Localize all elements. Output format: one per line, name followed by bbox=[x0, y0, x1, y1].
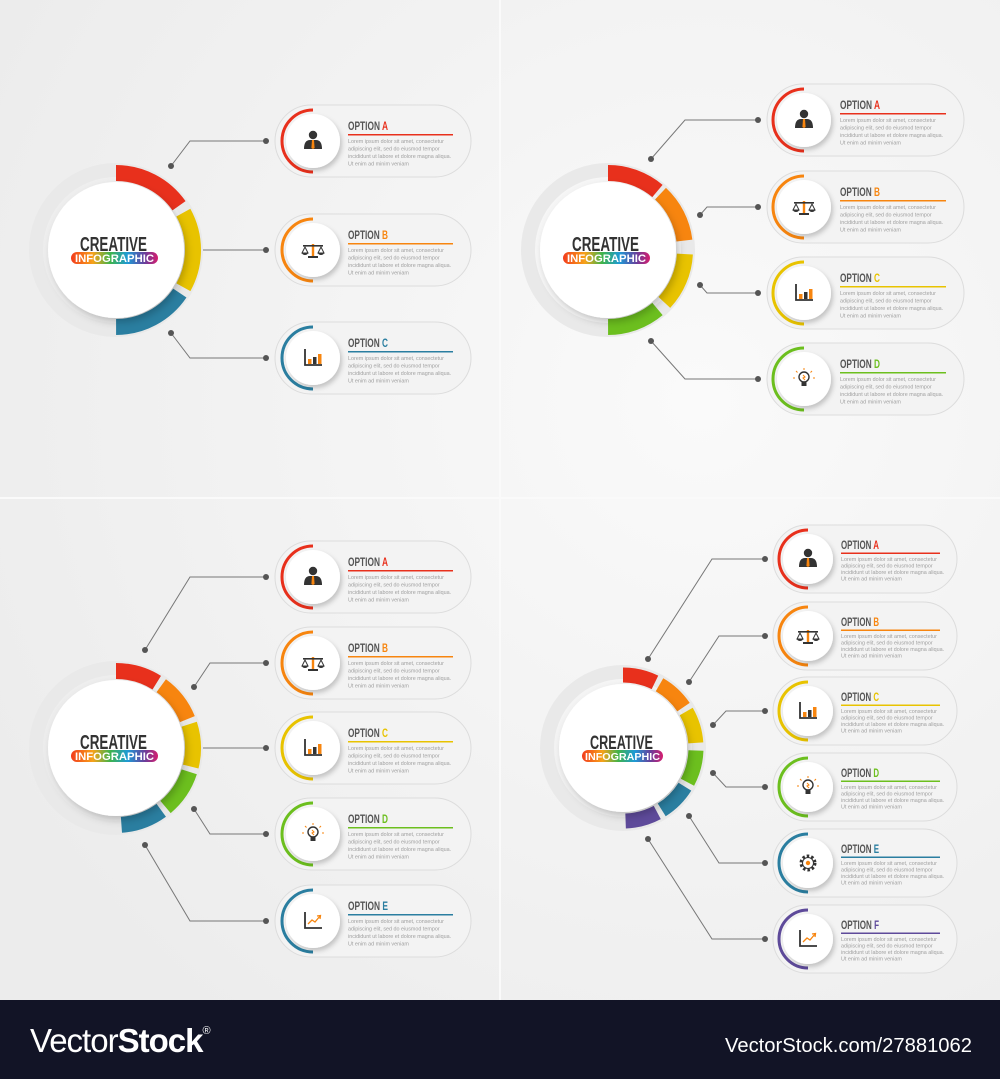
option C: OPTION C bbox=[348, 336, 388, 350]
main circle bbox=[522, 647, 724, 849]
option C: incididunt ut labore et dolore magna aliqua. bbox=[348, 761, 451, 767]
option A: incididunt ut labore et dolore magna aliqua. bbox=[840, 133, 943, 139]
option B bbox=[773, 602, 957, 670]
option D: OPTION D bbox=[840, 357, 880, 371]
option C bbox=[275, 712, 471, 784]
option C bbox=[767, 257, 964, 329]
option C: Ut enim ad minim veniam bbox=[348, 768, 409, 774]
option B bbox=[767, 171, 964, 243]
connectors bbox=[648, 559, 765, 939]
option E: OPTION E bbox=[841, 844, 879, 856]
option C: OPTION C bbox=[841, 692, 879, 704]
option A: incididunt ut labore et dolore magna aliqua. bbox=[348, 590, 451, 596]
option F: incididunt ut labore et dolore magna aliqua. bbox=[841, 950, 944, 956]
option C: OPTION C bbox=[840, 271, 880, 285]
option E: Lorem ipsum dolor sit amet, consectetur bbox=[841, 861, 937, 867]
option D: Ut enim ad minim veniam bbox=[840, 400, 901, 406]
option A: Lorem ipsum dolor sit amet, consectetur bbox=[348, 139, 444, 145]
option E: adipiscing elit, sed do eiusmod tempor bbox=[841, 868, 933, 874]
option A bbox=[275, 541, 471, 613]
option D: Lorem ipsum dolor sit amet, consectetur bbox=[348, 832, 444, 838]
connectors bbox=[651, 120, 758, 379]
main circle: CREATIVE bbox=[80, 234, 147, 256]
footer url: VectorStock.com/27881062 bbox=[725, 1035, 972, 1057]
option B: OPTION B bbox=[841, 617, 879, 629]
option F: Ut enim ad minim veniam bbox=[841, 956, 902, 962]
option C: adipiscing elit, sed do eiusmod tempor bbox=[840, 298, 932, 304]
option A bbox=[275, 105, 471, 177]
main circle: INFOGRAPHIC bbox=[585, 751, 660, 763]
option B: incididunt ut labore et dolore magna aliqua. bbox=[348, 263, 451, 269]
option B: incididunt ut labore et dolore magna aliqua. bbox=[841, 647, 944, 653]
main circle: CREATIVE bbox=[590, 733, 653, 754]
option E: Ut enim ad minim veniam bbox=[348, 942, 409, 948]
panel: 5 options bbox=[8, 541, 471, 957]
main circle bbox=[9, 143, 223, 357]
option A: Lorem ipsum dolor sit amet, consectetur bbox=[840, 118, 936, 124]
panel: 6 options bbox=[522, 525, 957, 973]
option A: Lorem ipsum dolor sit amet, consectetur bbox=[841, 557, 937, 563]
option F: adipiscing elit, sed do eiusmod tempor bbox=[841, 944, 933, 950]
option B: Ut enim ad minim veniam bbox=[841, 654, 902, 660]
option A: Lorem ipsum dolor sit amet, consectetur bbox=[348, 575, 444, 581]
connectors bbox=[145, 577, 266, 921]
option B: Lorem ipsum dolor sit amet, consectetur bbox=[348, 661, 444, 667]
option A: Ut enim ad minim veniam bbox=[840, 140, 901, 146]
option E: OPTION E bbox=[348, 899, 388, 913]
option B: OPTION B bbox=[348, 228, 388, 242]
option A: OPTION A bbox=[840, 98, 880, 112]
option C: incididunt ut labore et dolore magna aliqua. bbox=[348, 371, 451, 377]
option B bbox=[275, 214, 471, 286]
option A bbox=[767, 84, 964, 156]
main circle bbox=[499, 141, 717, 359]
option E bbox=[275, 885, 471, 957]
footer logo: VectorStock bbox=[30, 1022, 202, 1059]
option A: adipiscing elit, sed do eiusmod tempor bbox=[840, 126, 932, 132]
option B: Lorem ipsum dolor sit amet, consectetur bbox=[348, 248, 444, 254]
footer bar bbox=[0, 1000, 1000, 1079]
option A: OPTION A bbox=[841, 540, 879, 552]
option D: adipiscing elit, sed do eiusmod tempor bbox=[348, 840, 440, 846]
option D: incididunt ut labore et dolore magna aliqua. bbox=[841, 798, 944, 804]
option B: Ut enim ad minim veniam bbox=[348, 684, 409, 690]
option B: Ut enim ad minim veniam bbox=[840, 228, 901, 234]
option C: Ut enim ad minim veniam bbox=[841, 728, 902, 734]
option D: incididunt ut labore et dolore magna aliqua. bbox=[840, 392, 943, 398]
option D: OPTION D bbox=[841, 768, 879, 780]
option B: OPTION B bbox=[348, 641, 388, 655]
option C: incididunt ut labore et dolore magna aliqua. bbox=[841, 722, 944, 728]
option A: Ut enim ad minim veniam bbox=[348, 598, 409, 604]
option B: Lorem ipsum dolor sit amet, consectetur bbox=[841, 634, 937, 640]
option D: Ut enim ad minim veniam bbox=[348, 854, 409, 860]
option C: Ut enim ad minim veniam bbox=[348, 378, 409, 384]
option A: Ut enim ad minim veniam bbox=[348, 162, 409, 168]
option C: incididunt ut labore et dolore magna aliqua. bbox=[840, 306, 943, 312]
option D: Lorem ipsum dolor sit amet, consectetur bbox=[841, 785, 937, 791]
option E: Ut enim ad minim veniam bbox=[841, 880, 902, 886]
main circle: CREATIVE bbox=[572, 234, 639, 256]
option B: adipiscing elit, sed do eiusmod tempor bbox=[840, 212, 932, 218]
option E: Lorem ipsum dolor sit amet, consectetur bbox=[348, 919, 444, 925]
option A: adipiscing elit, sed do eiusmod tempor bbox=[348, 146, 440, 152]
option B: OPTION B bbox=[840, 185, 880, 199]
option D bbox=[767, 343, 964, 415]
option B: incididunt ut labore et dolore magna aliqua. bbox=[840, 220, 943, 226]
option C: Lorem ipsum dolor sit amet, consectetur bbox=[348, 746, 444, 752]
option C: Ut enim ad minim veniam bbox=[840, 314, 901, 320]
option B: incididunt ut labore et dolore magna aliqua. bbox=[348, 676, 451, 682]
option C: OPTION C bbox=[348, 726, 388, 740]
connectors bbox=[171, 141, 266, 358]
option C: Lorem ipsum dolor sit amet, consectetur bbox=[840, 291, 936, 297]
option D: adipiscing elit, sed do eiusmod tempor bbox=[840, 384, 932, 390]
option C: adipiscing elit, sed do eiusmod tempor bbox=[348, 754, 440, 760]
option C: Lorem ipsum dolor sit amet, consectetur bbox=[841, 709, 937, 715]
main circle: INFOGRAPHIC bbox=[75, 253, 154, 265]
option A bbox=[773, 525, 957, 593]
option D bbox=[275, 798, 471, 870]
option D: OPTION D bbox=[348, 812, 388, 826]
option E bbox=[773, 829, 957, 897]
option A: incididunt ut labore et dolore magna aliqua. bbox=[348, 154, 451, 160]
option A: Ut enim ad minim veniam bbox=[841, 576, 902, 582]
option D: Ut enim ad minim veniam bbox=[841, 804, 902, 810]
option D: incididunt ut labore et dolore magna aliqua. bbox=[348, 847, 451, 853]
option A: adipiscing elit, sed do eiusmod tempor bbox=[841, 564, 933, 570]
option C bbox=[275, 322, 471, 394]
option B: adipiscing elit, sed do eiusmod tempor bbox=[348, 256, 440, 262]
option A: adipiscing elit, sed do eiusmod tempor bbox=[348, 582, 440, 588]
option F: Lorem ipsum dolor sit amet, consectetur bbox=[841, 937, 937, 943]
main circle: INFOGRAPHIC bbox=[567, 253, 646, 265]
option B bbox=[275, 627, 471, 699]
option F bbox=[773, 905, 957, 973]
option C: adipiscing elit, sed do eiusmod tempor bbox=[348, 364, 440, 370]
option A: OPTION A bbox=[348, 119, 388, 133]
option D bbox=[773, 753, 957, 821]
option B: adipiscing elit, sed do eiusmod tempor bbox=[348, 668, 440, 674]
option C: adipiscing elit, sed do eiusmod tempor bbox=[841, 716, 933, 722]
option E: adipiscing elit, sed do eiusmod tempor bbox=[348, 926, 440, 932]
main circle bbox=[8, 640, 224, 856]
panel: 3 options bbox=[9, 105, 471, 394]
option E: incididunt ut labore et dolore magna aliqua. bbox=[348, 934, 451, 940]
option F: OPTION F bbox=[841, 920, 879, 932]
option C bbox=[773, 677, 957, 745]
option D: Lorem ipsum dolor sit amet, consectetur bbox=[840, 377, 936, 383]
option D: adipiscing elit, sed do eiusmod tempor bbox=[841, 792, 933, 798]
option B: Lorem ipsum dolor sit amet, consectetur bbox=[840, 205, 936, 211]
main circle: CREATIVE bbox=[80, 732, 147, 754]
option A: OPTION A bbox=[348, 555, 388, 569]
panel: 4 options bbox=[499, 84, 964, 415]
footer logo: ® bbox=[202, 1025, 210, 1037]
option B: Ut enim ad minim veniam bbox=[348, 270, 409, 276]
option E: incididunt ut labore et dolore magna aliqua. bbox=[841, 874, 944, 880]
option C: Lorem ipsum dolor sit amet, consectetur bbox=[348, 356, 444, 362]
option A: incididunt ut labore et dolore magna aliqua. bbox=[841, 570, 944, 576]
option B: adipiscing elit, sed do eiusmod tempor bbox=[841, 640, 933, 646]
main circle: INFOGRAPHIC bbox=[75, 751, 154, 763]
